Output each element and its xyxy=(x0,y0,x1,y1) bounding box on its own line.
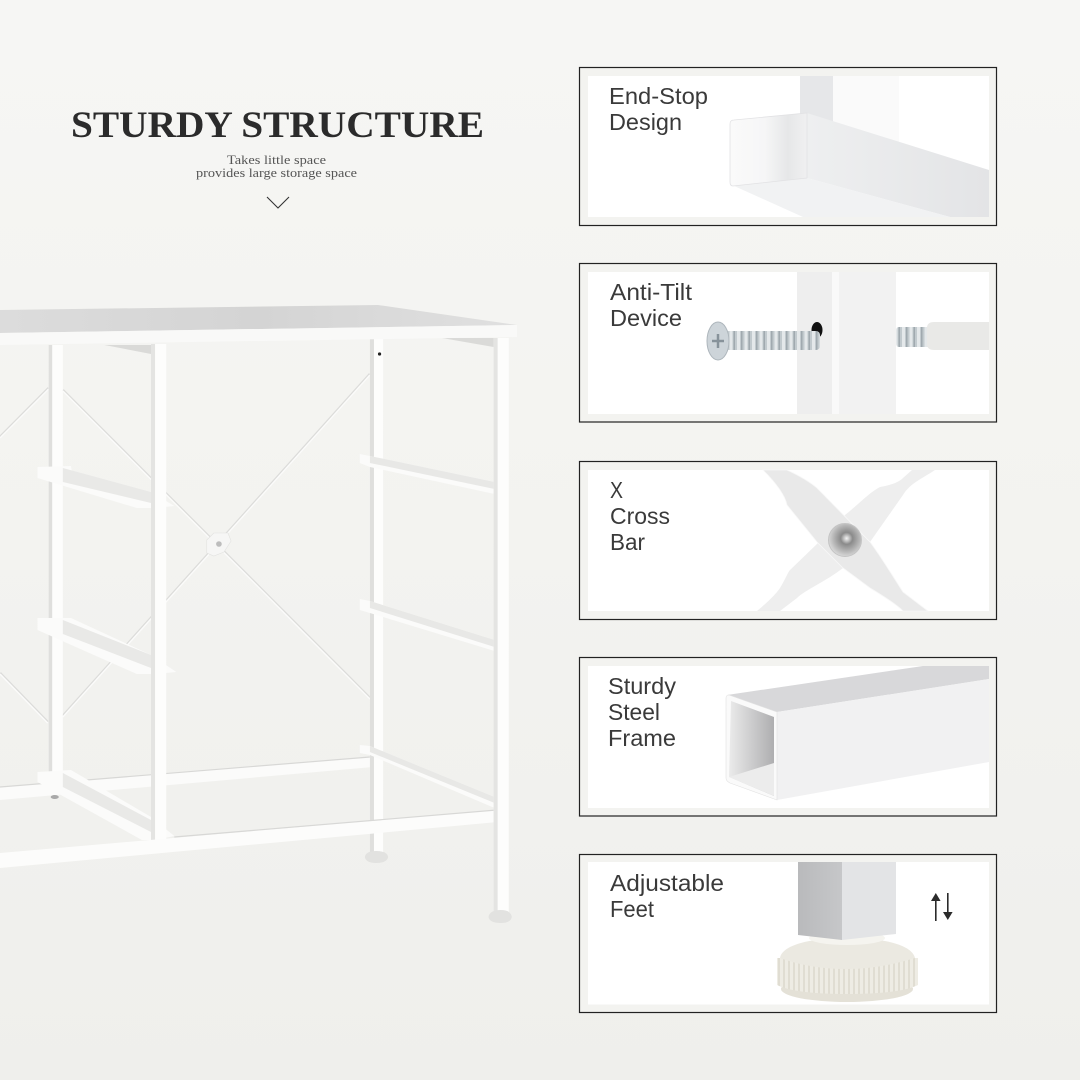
label: sturdy steel frame xyxy=(608,673,676,751)
label: x cross bar: X xyxy=(610,477,623,503)
label: end-stop design: Design xyxy=(609,109,682,135)
photo: adjustable foot xyxy=(777,862,918,1002)
label: x cross bar: Cross xyxy=(610,503,670,529)
top bracket support left xyxy=(104,345,151,354)
label: adjustable feet: Adjustable xyxy=(610,870,724,896)
leg right back xyxy=(365,338,388,863)
subtitle: Takes little space xyxy=(227,153,327,167)
panel: anti-tilt device xyxy=(580,264,996,422)
panel: sturdy steel frame xyxy=(580,658,996,816)
label: sturdy steel frame: Frame xyxy=(608,725,676,751)
illustration: white shelf frame xyxy=(0,305,517,923)
label: anti-tilt device: Device xyxy=(610,305,682,331)
photo: end-stop bracket xyxy=(730,76,989,217)
small bolt xyxy=(51,795,59,799)
label: end-stop design: End-Stop xyxy=(609,83,708,109)
leg front right xyxy=(489,338,512,923)
panel: x cross bar xyxy=(580,462,996,620)
front rail xyxy=(0,810,498,868)
top bracket support right xyxy=(442,338,494,347)
label: anti-tilt device xyxy=(610,279,693,331)
label: adjustable feet: Feet xyxy=(610,896,655,922)
icon: up and down arrows xyxy=(931,893,953,921)
label: sturdy steel frame: Steel xyxy=(608,699,660,725)
right shelf bracket 1 xyxy=(360,454,495,494)
right shelf bracket 2 xyxy=(360,599,495,651)
photo: x cross joint xyxy=(757,470,935,611)
left shelf bracket 1 xyxy=(37,466,174,508)
label: x cross bar xyxy=(610,477,670,555)
right shelf bracket 3 xyxy=(360,745,495,808)
leg front inner xyxy=(151,344,166,842)
photo: square steel tube xyxy=(726,666,989,800)
label: x cross bar: Bar xyxy=(610,529,645,555)
subtitle: provides large storage space xyxy=(196,166,358,180)
x cross bars xyxy=(0,374,370,723)
frame structure xyxy=(0,338,512,923)
leg left back xyxy=(49,345,63,775)
photo: post and screw xyxy=(707,272,989,414)
label: end-stop design xyxy=(609,83,708,135)
panel: adjustable feet xyxy=(580,854,996,1012)
title: STURDY STRUCTURE xyxy=(71,105,484,146)
table top surface xyxy=(0,305,517,333)
subtitle xyxy=(196,153,358,180)
icon: chevron down xyxy=(267,197,289,208)
rivet xyxy=(828,524,862,556)
back rail xyxy=(0,757,373,800)
panel: end-stop design xyxy=(580,68,996,226)
label: adjustable feet xyxy=(610,870,724,922)
left shelf bracket 3 xyxy=(37,770,174,840)
table top front edge xyxy=(0,325,517,345)
label: anti-tilt device: Anti-Tilt xyxy=(610,279,693,305)
label: sturdy steel frame: Sturdy xyxy=(608,673,676,699)
left shelf bracket 2 xyxy=(37,618,176,674)
